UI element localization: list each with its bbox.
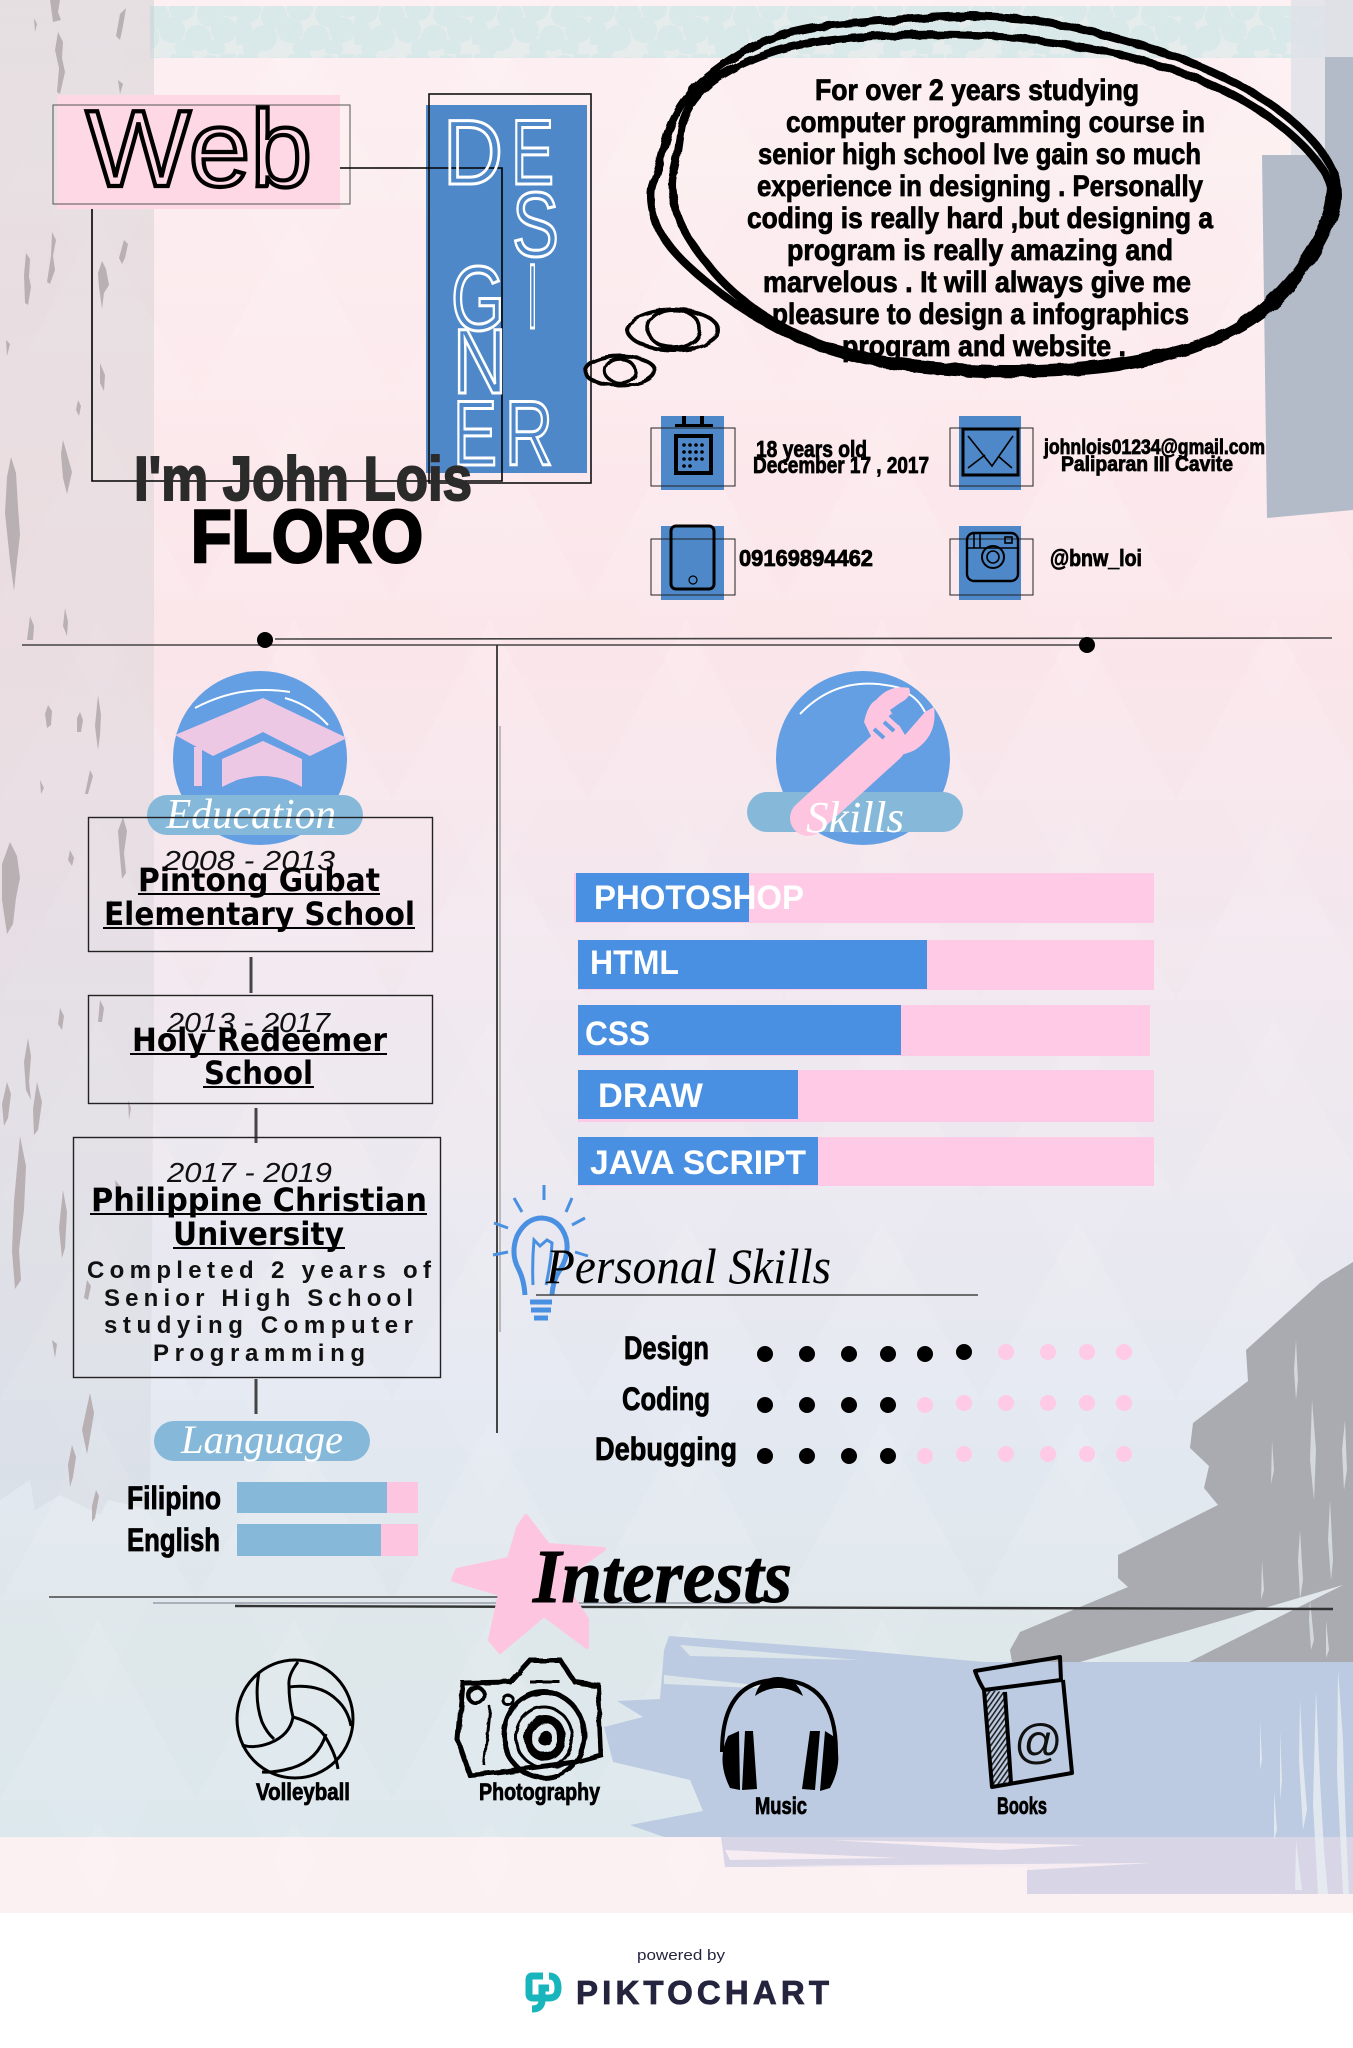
title: Designer: I [527,246,538,348]
interest: books: Books [997,1793,1047,1820]
bubble text: senior high school Ive gain so much [758,138,1201,171]
skill bar: Draw [578,1070,1154,1122]
icon: camera logo [967,533,1018,581]
education box 1 [88,818,432,952]
title: Designer: N [453,311,507,413]
education box 3: Completed 2 years of [87,1257,432,1284]
education box 3: Senior High School [104,1285,413,1312]
interests heading: Interests [532,1535,792,1619]
icon: light bulb [493,1185,588,1318]
language bars [127,1480,418,1558]
education box 1: Elementary School [104,895,415,933]
interest: photography: Photography [479,1779,601,1806]
footer: powered by [637,1947,726,1964]
title: Designer: R [505,383,553,485]
bubble text: computer programming course in [786,106,1205,139]
contact: phone [651,526,873,600]
bubble text: marvelous . It will always give me [763,266,1191,299]
personal skill: Design [624,1330,1132,1366]
personal skill: Design: Design [624,1330,709,1366]
personal skill: Coding: Coding [622,1381,710,1417]
skill bar: CSS [578,1005,1150,1056]
personal skills heading: Personal Skills [545,1238,831,1294]
left distressed strip [0,0,154,1522]
contact: age and birthday [651,416,929,490]
education box 3: University [173,1215,344,1253]
footer [0,1913,1353,2048]
blue brush, lower right [604,1636,1353,1894]
education box 3: Programming [153,1340,365,1367]
contact: age and birthday: December 17 , 2017 [753,452,929,478]
education box 3: studying Computer [104,1312,413,1339]
footer: PIKTOCHART [576,1974,829,2011]
title: Designer: S [512,174,559,276]
bubble text: pleasure to design a infographics [772,298,1189,331]
icon: piktochart logo [529,1976,558,2009]
education box 3: 2017 - 2019 [166,1157,332,1188]
contact: phone: 09169894462 [739,545,873,571]
interest: music: Music [755,1793,807,1820]
interest: volleyball: Volleyball [256,1779,350,1806]
title: Designer: G [451,248,505,350]
education box 2: School [204,1054,313,1092]
icon: pink star [453,1516,604,1652]
skill bar: Photoshop [574,873,1154,923]
name: FLORO [191,495,423,578]
bubble text: program is really amazing and [787,234,1173,267]
icon: book [975,1657,1072,1787]
language pill: Language [180,1417,343,1462]
decorative dotted band [150,6,1353,58]
personal skill: Debugging [595,1431,1132,1467]
education box 1: Pintong Gubat [138,861,380,899]
language bars: Filipino [127,1480,221,1516]
personal skill: Debugging: Debugging [595,1431,737,1467]
education box 3 [74,1138,440,1378]
gray brush, lower right [1010,1262,1353,1669]
education box 2 [88,996,432,1104]
contact: instagram: @bnw_loi [1050,545,1142,571]
bubble text: experience in designing . Personally [757,170,1203,203]
contact: email and address [950,416,1265,490]
name [134,445,472,578]
title: Designer: E [511,102,554,204]
contact: email and address: johnlois01234@gmail.com [1043,436,1265,459]
interest: volleyball [237,1660,353,1806]
interest: photography [458,1660,601,1806]
name: I'm John Lois [134,445,472,514]
skill bar: Draw: DRAW [598,1077,704,1115]
education pill: Education [165,792,336,838]
education box 3: Philippine Christian [91,1181,427,1219]
skill bar: CSS: CSS [585,1015,650,1053]
skill bar: Java Script [578,1137,1154,1186]
education box 2: Holy Redeemer [132,1021,387,1059]
icon: envelope [963,429,1018,475]
skills pill: Skills [806,793,904,842]
icon: calendar [675,416,713,473]
contact: email and address: Paliparan III Cavite [1061,453,1233,476]
gray brush, top right [1262,0,1353,518]
skill bar: HTML [578,940,1154,990]
interests rule lines [49,1597,1333,1609]
language bars: English [127,1522,220,1558]
skills icon: wrench [776,671,950,845]
icon: camera [458,1660,601,1778]
icon: volleyball [237,1660,353,1778]
interest: music [722,1677,838,1820]
contact: instagram [950,526,1142,600]
skills pill [747,687,963,842]
icon: phone [671,526,714,589]
skill bar: Java Script: JAVA SCRIPT [590,1144,806,1182]
title: Web: Web [86,88,312,210]
icon: book: @ [1014,1716,1063,1769]
bubble text [747,74,1213,363]
interest: books [975,1657,1072,1820]
bubble text: coding is really hard ,but designing a [747,202,1213,235]
title: Designer: E [453,383,497,485]
bubble text: program and website . [842,330,1126,363]
title: Designer: D [443,102,503,204]
contact: age and birthday: 18 years old [756,436,867,462]
section divider with dots [22,632,1332,1433]
education box 2: 2013 - 2017 [166,1007,332,1038]
bubble text: For over 2 years studying [815,74,1139,107]
thought bubble [585,16,1337,386]
skill bar: Photoshop: PHOTOSHOP [594,879,804,917]
education box 1: 2008 - 2013 [162,845,335,876]
personal skill: Coding [622,1381,1132,1417]
icon: headphones [722,1677,838,1791]
title: Designer [92,94,591,485]
skill bar: HTML: HTML [590,944,679,982]
education icon: graduation cap [173,671,347,845]
